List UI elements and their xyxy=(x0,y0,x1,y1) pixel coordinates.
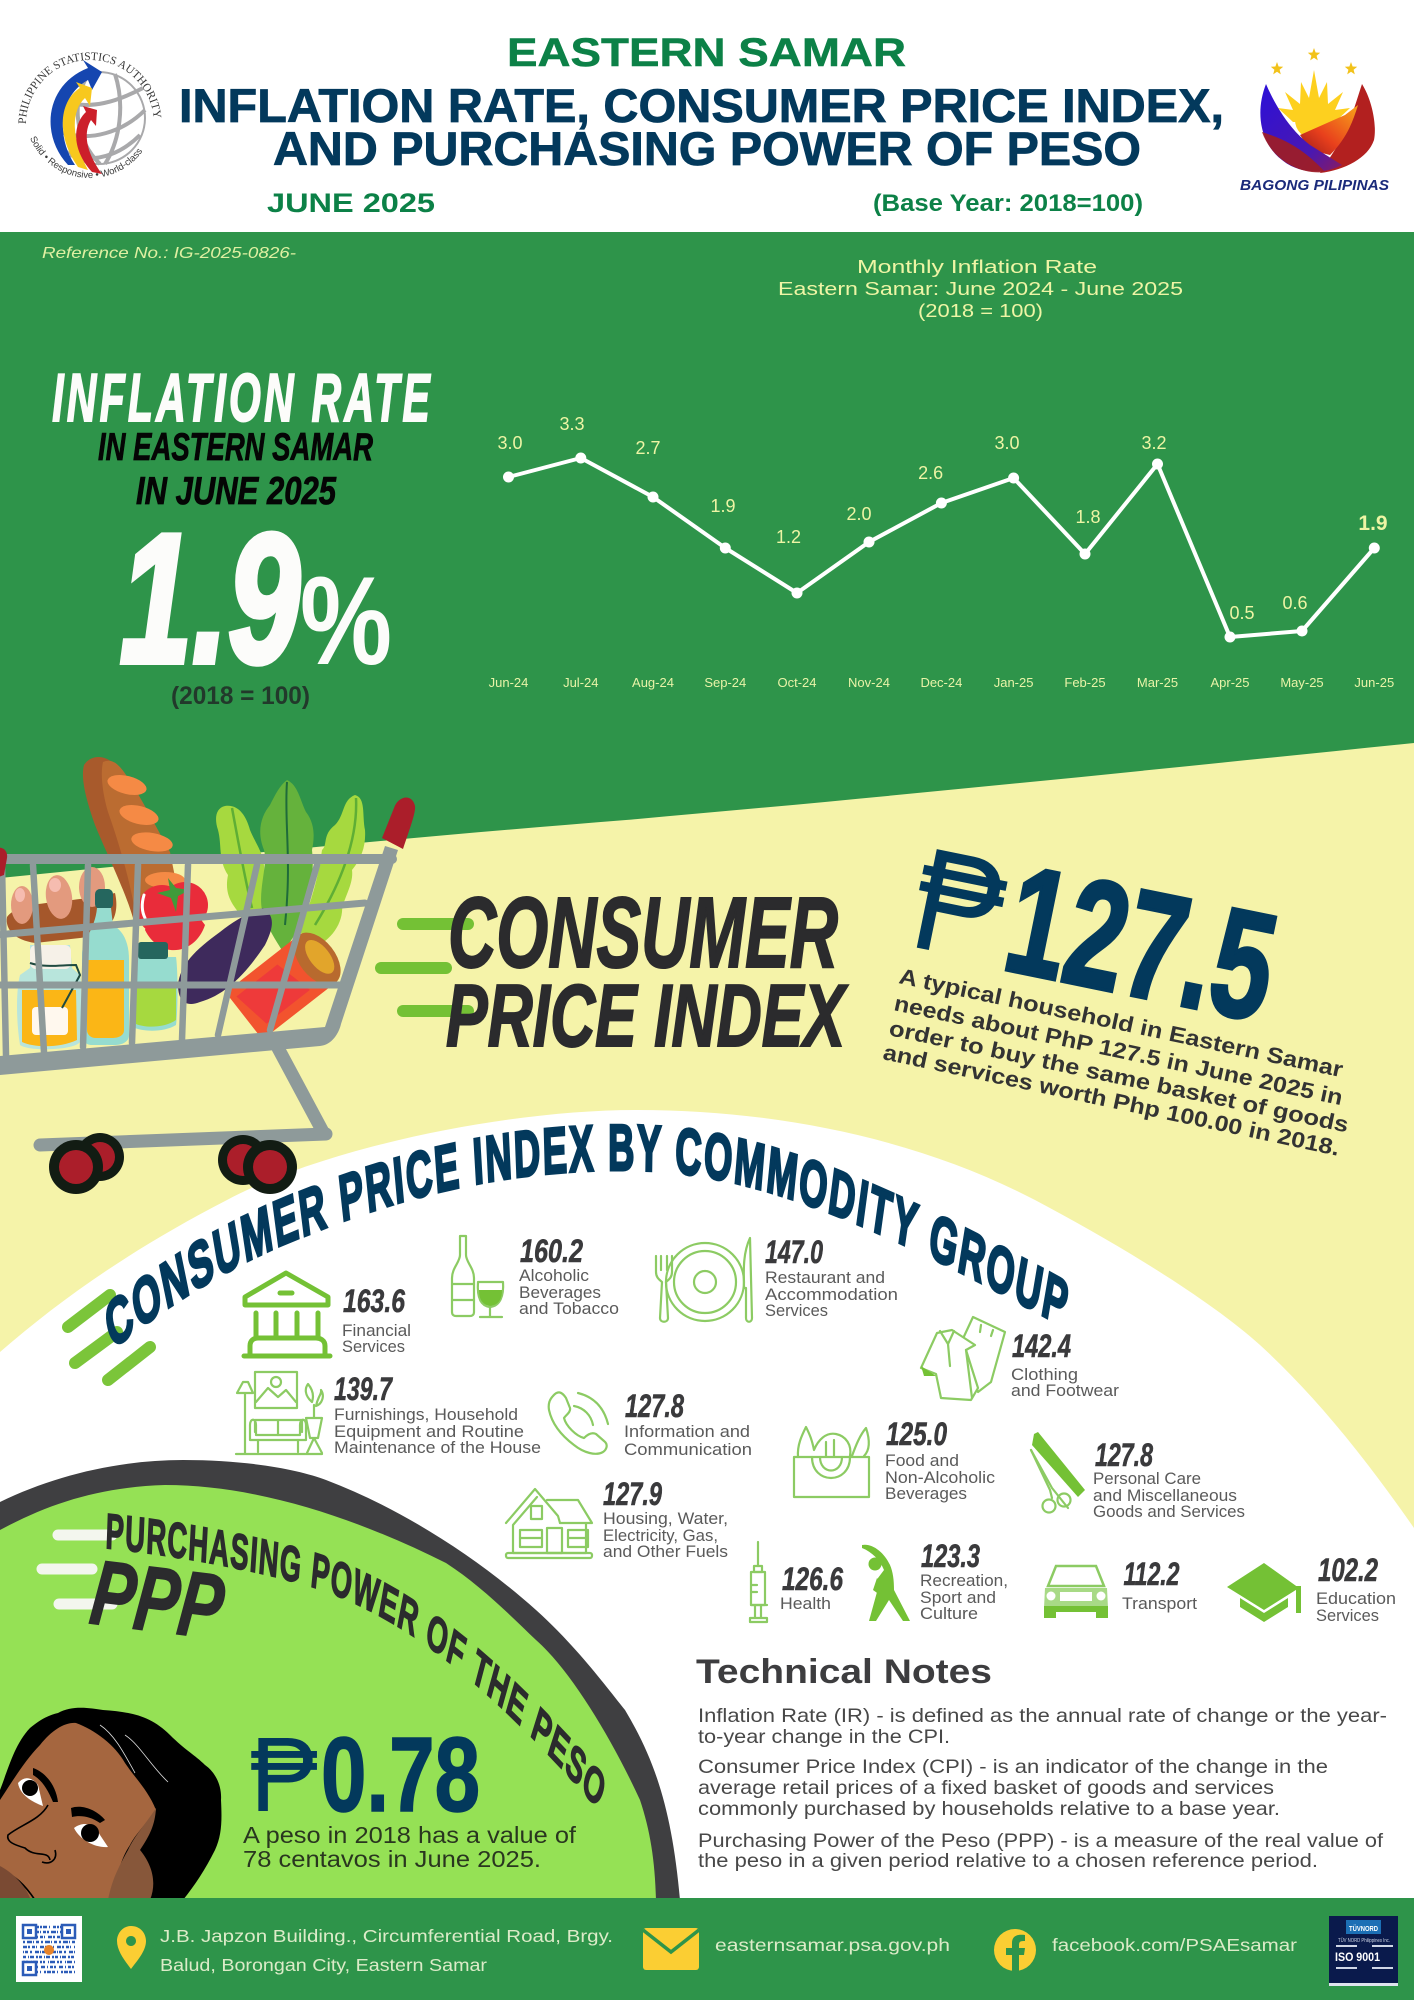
subheading: in Eastern Samar: IN EASTERN SAMAR xyxy=(98,426,373,469)
icon: wine bottle and glass xyxy=(452,1236,503,1317)
base year: (Base Year: 2018=100) xyxy=(873,190,1143,217)
icon: living room xyxy=(236,1372,323,1454)
commodity: information and communication xyxy=(549,1388,752,1459)
chart title xyxy=(778,256,1183,321)
data labels: 1.9 xyxy=(710,496,736,516)
badge: ISO 9001 xyxy=(1329,1916,1398,1986)
data labels: 3.0 xyxy=(497,433,523,453)
note: consumer price index: Consumer Price Index (CPI) - is an indicator of the change in the xyxy=(698,1756,1328,1778)
label: Accommodation xyxy=(765,1286,898,1304)
commodity: transport xyxy=(1044,1556,1197,1618)
label xyxy=(519,1267,619,1318)
accent slashes xyxy=(68,1295,150,1380)
data labels: 1.2 xyxy=(776,527,801,547)
chart title: Monthly Inflation Rate xyxy=(857,256,1097,277)
description: A peso in 2018 has a value of xyxy=(243,1822,576,1848)
address: J.B. Japzon Building., Circumferential Road, Brgy. xyxy=(160,1926,613,1946)
note: inflation rate: to-year change in the CPI. xyxy=(698,1726,950,1748)
groceries: tomato xyxy=(137,872,208,950)
label xyxy=(334,1406,541,1457)
groceries: eggplant xyxy=(178,908,272,1004)
x axis labels: Sep-24 xyxy=(704,675,746,690)
big value: peso 127.5: 127.5 xyxy=(993,833,1290,1054)
panel: commodity group white arc xyxy=(0,1110,1414,2000)
groceries: bread rolls xyxy=(7,867,116,943)
header xyxy=(18,31,1389,218)
label: Beverages xyxy=(519,1284,601,1302)
label: and Tobacco xyxy=(519,1300,619,1318)
label xyxy=(920,1572,1008,1623)
big value: peso 0.78: ₱ xyxy=(250,1716,318,1834)
logo: Bagong Pilipinas xyxy=(1240,48,1389,194)
label: Housing, Water, xyxy=(603,1510,728,1528)
label: Personal Care xyxy=(1093,1470,1201,1488)
dark arc xyxy=(0,1460,680,1900)
note: consumer price index: average retail prices of a fixed basket of goods and services xyxy=(698,1777,1274,1799)
illustration: face xyxy=(0,1708,221,1900)
value: 112.2 xyxy=(1124,1556,1180,1592)
logo wordmark: BAGONG PILIPINAS xyxy=(1240,178,1389,194)
x axis labels: Jun-25 xyxy=(1354,675,1394,690)
eyes and brows xyxy=(18,1768,108,1847)
label: Services xyxy=(342,1338,405,1356)
x axis labels: Aug-24 xyxy=(632,675,674,690)
heading: Eastern Samar: EASTERN SAMAR xyxy=(507,31,906,75)
note: consumer price index xyxy=(698,1756,1328,1820)
label: Education xyxy=(1316,1590,1396,1608)
commodity: education services xyxy=(1227,1552,1396,1625)
heading: consumer price index: PRICE INDEX xyxy=(446,966,849,1065)
x axis labels: Oct-24 xyxy=(777,675,817,690)
data labels: 3.0 xyxy=(994,433,1020,453)
base year note: (2018 = 100) xyxy=(171,682,310,710)
x axis labels: Dec-24 xyxy=(920,675,962,690)
chart title: Eastern Samar: June 2024 - June 2025 xyxy=(778,278,1183,299)
icon: shirt and trousers xyxy=(921,1317,1005,1400)
x axis labels: May-25 xyxy=(1280,675,1324,690)
value: 160.2 xyxy=(520,1233,583,1269)
data labels: 3.3 xyxy=(559,414,585,434)
date: JUNE 2025 xyxy=(267,188,435,218)
green arc xyxy=(0,1485,656,1900)
title: AND PURCHASING POWER OF PESO xyxy=(273,122,1141,175)
label: Clothing xyxy=(1011,1366,1078,1384)
badge: ISO 9001: TÜV NORD Philippines Inc. xyxy=(1338,1937,1390,1944)
label xyxy=(624,1423,752,1459)
logo ring text: PHILIPPINE STATISTICS AUTHORITY xyxy=(18,52,162,124)
cart handle xyxy=(382,798,415,849)
heading: consumer price index xyxy=(446,877,849,1065)
description: A typical household in Eastern Samar xyxy=(897,963,1346,1082)
label: Communication xyxy=(624,1441,752,1459)
big value: peso 0.78 xyxy=(250,1716,480,1834)
value: 127.9 xyxy=(603,1476,662,1512)
label xyxy=(342,1322,411,1356)
value: 102.2 xyxy=(1318,1552,1378,1588)
groceries: bottles and jars xyxy=(17,889,178,1049)
x axis labels: Nov-24 xyxy=(848,675,890,690)
icon: location pin xyxy=(117,1926,146,1969)
value: 163.6 xyxy=(343,1283,405,1319)
label: Non-Alcoholic xyxy=(885,1469,995,1487)
label: Transport xyxy=(1122,1595,1197,1613)
address: Balud, Borongan City, Eastern Samar xyxy=(160,1955,487,1975)
label: Equipment and Routine xyxy=(334,1423,524,1441)
data labels: 0.6 xyxy=(1282,593,1308,613)
x axis labels: Jan-25 xyxy=(994,675,1033,690)
icon: syringe xyxy=(750,1542,767,1622)
heading: inflation rate: INFLATION RATE xyxy=(52,359,433,436)
panel: consumer price index headline xyxy=(381,814,1351,1161)
x axis labels: Jun-24 xyxy=(489,675,528,690)
description xyxy=(243,1822,576,1872)
icon: telephone xyxy=(549,1392,608,1454)
badge: ISO 9001: TÜVNORD xyxy=(1349,1924,1378,1933)
QR code xyxy=(16,1916,82,1982)
label: Goods and Services xyxy=(1093,1503,1245,1521)
x axis labels: Mar-25 xyxy=(1137,675,1178,690)
address xyxy=(160,1926,613,1975)
value: 126.6 xyxy=(782,1561,843,1597)
commodity: personal care and miscellaneous xyxy=(1031,1432,1245,1521)
icon: plate and cutlery xyxy=(656,1238,752,1322)
commodity: restaurant and accommodation services xyxy=(656,1234,898,1322)
note: purchasing power of the peso: Purchasing Power of the Peso (PPP) - is a measure of the real value of xyxy=(698,1830,1384,1852)
label: Food and xyxy=(885,1452,959,1470)
nose and mouth lines xyxy=(0,1805,56,1900)
value: 125.0 xyxy=(886,1416,947,1452)
label xyxy=(1316,1590,1396,1625)
label: Electricity, Gas, xyxy=(603,1527,718,1545)
note: inflation rate xyxy=(698,1705,1387,1748)
data labels: 1.8 xyxy=(1075,507,1101,527)
icon: graduation cap xyxy=(1227,1563,1301,1622)
groceries: canned food xyxy=(226,924,350,1040)
label: Information and xyxy=(624,1423,750,1441)
accent lines xyxy=(381,924,468,1011)
label: Services xyxy=(1316,1607,1379,1625)
note: inflation rate: Inflation Rate (IR) - is defined as the annual rate of change or the year- xyxy=(698,1705,1387,1727)
commodity: furnishings, household equipment xyxy=(236,1371,541,1457)
label xyxy=(1093,1470,1245,1521)
label xyxy=(885,1452,995,1503)
commodity: recreation, sport and culture xyxy=(862,1538,1008,1623)
label: Health xyxy=(780,1595,831,1613)
label: Beverages xyxy=(885,1485,967,1503)
label: Alcoholic xyxy=(519,1267,589,1285)
big value: peso 127.5 xyxy=(899,814,1290,1054)
commodity: alcoholic beverages and tobacco xyxy=(452,1233,619,1318)
logo motto text: Solid • Responsive • World-class xyxy=(30,136,142,178)
cart wheels xyxy=(49,1133,297,1194)
icon: house xyxy=(506,1489,592,1558)
label: Culture xyxy=(920,1605,978,1623)
data labels: 2.6 xyxy=(918,463,943,483)
label: and Other Fuels xyxy=(603,1543,728,1561)
title xyxy=(179,79,1224,175)
data labels: 0.5 xyxy=(1229,603,1255,623)
label xyxy=(1011,1366,1120,1400)
icon: bank xyxy=(244,1273,330,1356)
note: consumer price index: commonly purchased by households relative to a base year. xyxy=(698,1798,1280,1820)
panel: inflation rate headline xyxy=(52,359,433,710)
accent lines xyxy=(42,1535,112,1604)
label: Services xyxy=(765,1302,828,1320)
icon: comb and scissors xyxy=(1031,1432,1085,1512)
chart title: (2018 = 100) xyxy=(918,300,1043,321)
description xyxy=(881,963,1351,1161)
x axis labels: Jul-24 xyxy=(563,675,599,690)
big value: peso 127.5: ₱ xyxy=(900,816,1019,993)
data labels: 2.7 xyxy=(635,438,661,458)
big value: 1.9 percent: % xyxy=(300,552,392,691)
icon: facebook xyxy=(994,1929,1036,1971)
label: Sport and xyxy=(920,1589,996,1607)
label: Maintenance of the House xyxy=(334,1439,541,1457)
description: and services worth Php 100.00 in 2018. xyxy=(881,1039,1342,1161)
data labels: 1.9 xyxy=(1358,512,1388,535)
badge: ISO 9001: ISO 9001 xyxy=(1335,1950,1380,1964)
value: 123.3 xyxy=(921,1538,980,1574)
description: 78 centavos in June 2025. xyxy=(243,1846,541,1872)
value: 127.8 xyxy=(625,1388,684,1424)
description: order to buy the same basket of goods xyxy=(887,1015,1351,1137)
label: and Miscellaneous xyxy=(1093,1487,1237,1505)
panel: technical notes xyxy=(696,1653,1387,1872)
x axis labels xyxy=(489,675,1394,690)
value: 147.0 xyxy=(765,1234,823,1270)
heading: purchasing power of the peso: PURCHASING POWER OF THE PESO xyxy=(106,1513,604,1804)
commodity: clothing and footwear xyxy=(921,1317,1120,1400)
big value: 1.9 percent: 1.9 xyxy=(120,495,300,701)
note: purchasing power of the peso: the peso in a given period relative to a chosen reference period. xyxy=(698,1850,1318,1872)
x axis labels: Apr-25 xyxy=(1210,675,1250,690)
label xyxy=(603,1510,728,1561)
description: needs about PhP 127.5 in June 2025 in xyxy=(892,990,1345,1110)
heading: consumer price index by commodity group: CONSUMER PRICE INDEX BY COMMODITY GROUP xyxy=(106,1124,1068,1344)
heading: consumer price index: CONSUMER xyxy=(448,877,838,989)
title: INFLATION RATE, CONSUMER PRICE INDEX, xyxy=(179,79,1224,132)
reference number: Reference No.: IG-2025-0826- xyxy=(42,245,296,262)
heading: PPP: PPP xyxy=(86,1542,229,1659)
groceries: lettuce xyxy=(216,780,365,952)
footer xyxy=(0,1898,1414,2000)
commodity: food and non-alcoholic beverages xyxy=(794,1416,995,1503)
x axis labels: Feb-25 xyxy=(1064,675,1106,690)
commodity: financial services xyxy=(244,1273,411,1356)
label: Financial xyxy=(342,1322,411,1340)
label: Recreation, xyxy=(920,1572,1008,1590)
note: purchasing power of the peso xyxy=(698,1830,1384,1872)
commodity: health xyxy=(750,1542,843,1622)
value: 142.4 xyxy=(1012,1328,1071,1364)
label: Restaurant and xyxy=(765,1269,885,1287)
subheading: in June 2025: IN JUNE 2025 xyxy=(136,470,337,513)
logo: Philippine Statistics Authority xyxy=(18,52,162,178)
data labels xyxy=(497,414,1388,623)
value: 139.7 xyxy=(334,1371,394,1407)
cart frame xyxy=(0,859,392,1145)
icon: car xyxy=(1044,1566,1108,1618)
illustration: shopping cart with groceries xyxy=(0,757,415,1194)
facebook page: facebook.com/PSAEsamar xyxy=(1052,1935,1297,1955)
line chart: monthly inflation rate xyxy=(489,414,1394,690)
panel: purchasing power of the peso xyxy=(0,1460,680,1898)
groceries: baguette xyxy=(83,757,176,918)
label xyxy=(765,1269,898,1320)
icon: email xyxy=(643,1928,699,1970)
big value: peso 0.78: 0.78 xyxy=(321,1716,480,1834)
label: Furnishings, Household xyxy=(334,1406,518,1424)
panel: consumer price index cream band xyxy=(0,743,1414,1600)
heading: Technical Notes xyxy=(696,1653,992,1691)
data labels: 2.0 xyxy=(846,504,872,524)
panel: inflation rate green band xyxy=(0,232,1414,912)
website: easternsamar.psa.gov.ph xyxy=(715,1935,950,1955)
label: and Footwear xyxy=(1011,1382,1120,1400)
value: 127.8 xyxy=(1095,1437,1153,1473)
icon: grocery bag xyxy=(794,1427,869,1497)
icon: stretching figure xyxy=(862,1545,910,1621)
data labels: 3.2 xyxy=(1141,433,1167,453)
commodity: housing, water, electricity xyxy=(506,1476,728,1561)
